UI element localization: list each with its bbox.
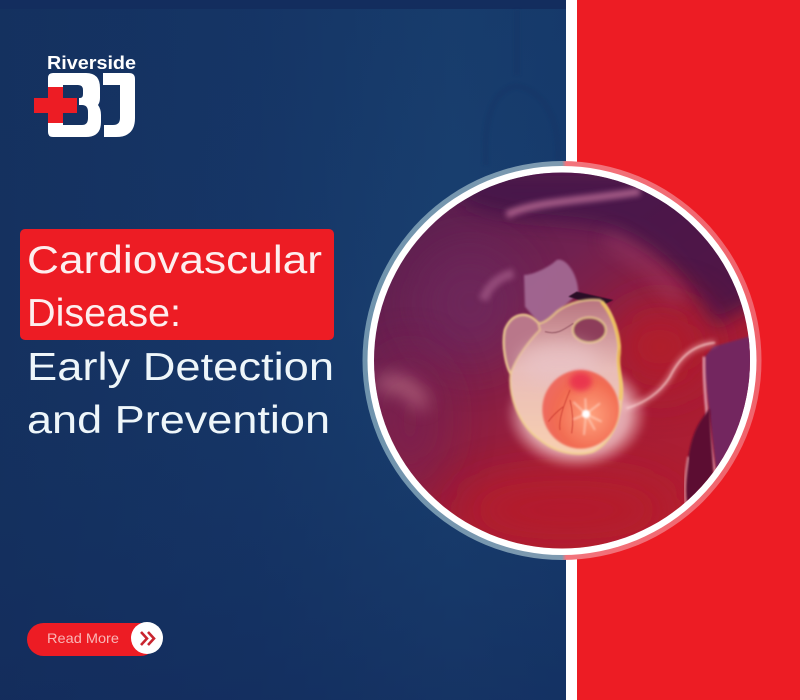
left atrium lobe — [504, 315, 540, 373]
panel: navy background — [0, 0, 566, 700]
white ring — [368, 166, 756, 555]
logo red cross — [34, 87, 77, 123]
outer tinted ring — [362, 161, 762, 560]
title — [27, 239, 334, 442]
panel: red background — [577, 0, 800, 700]
heart halo — [506, 370, 648, 470]
right atrium — [573, 317, 606, 343]
logo letter B — [48, 73, 101, 137]
title line 3: Early Detection — [27, 346, 334, 389]
title line 2: Disease: — [27, 292, 181, 335]
title line 4: and Prevention — [27, 399, 330, 442]
shoulder shading — [460, 170, 760, 327]
aorta dark gap — [568, 292, 613, 307]
button icon: chevrons — [131, 622, 163, 654]
white vertical divider — [566, 0, 577, 700]
chest contour line — [623, 343, 715, 408]
golden edge — [602, 302, 621, 400]
heart illustration in circular frame — [360, 160, 764, 564]
button pill — [27, 623, 157, 656]
logo wordmark: Riverside — [47, 52, 136, 73]
button label: Read More — [47, 630, 119, 646]
title line 1: Cardiovascular — [27, 239, 322, 282]
logo: Riverside BJ — [34, 52, 136, 137]
arm — [704, 336, 750, 470]
logo letter J — [103, 73, 135, 137]
read more button — [27, 622, 163, 656]
star burst — [573, 398, 602, 435]
infarct area — [542, 370, 619, 449]
red title highlight box — [20, 229, 334, 340]
vessels — [524, 260, 578, 327]
pale muscle — [520, 343, 600, 383]
photo disc — [374, 172, 750, 548]
clavicle highlight — [507, 192, 640, 215]
coronary vessels — [548, 390, 573, 433]
heart body — [504, 300, 622, 454]
